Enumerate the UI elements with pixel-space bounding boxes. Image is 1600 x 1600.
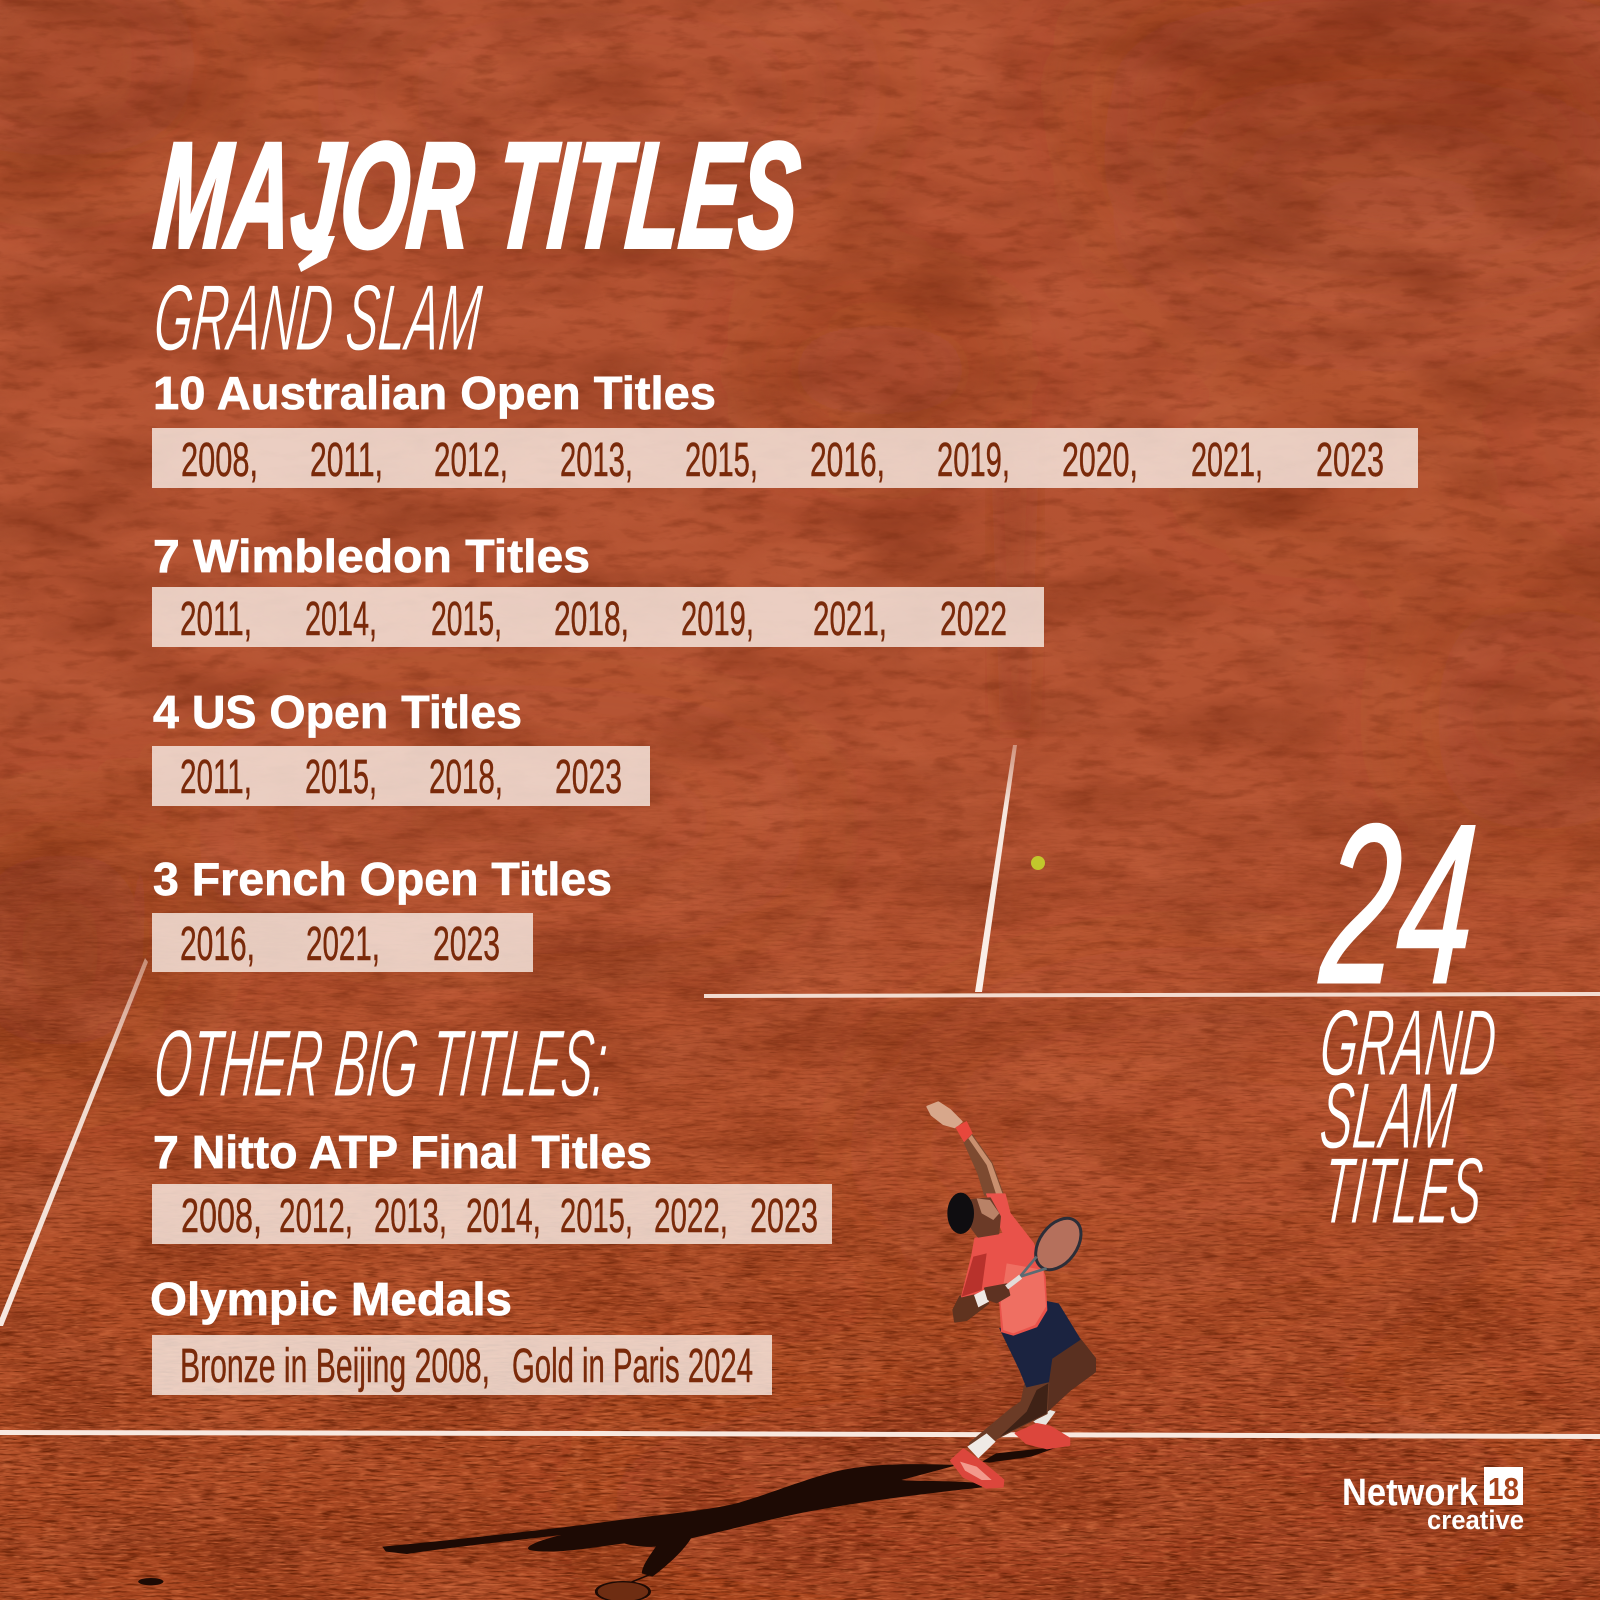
- panel: US Open: [152, 686, 650, 806]
- logo: Network18 creative: creative: [1427, 1505, 1524, 1535]
- years list: 2023: [433, 918, 500, 971]
- tennis ball: [1031, 856, 1045, 870]
- number 24: 24: [1314, 777, 1483, 1030]
- years list: 2019,: [681, 593, 754, 646]
- heading: Nitto ATP: 7 Nitto ATP Final Titles: [153, 1126, 652, 1178]
- head: face and beard: [968, 1198, 1000, 1237]
- years list: 2023: [1316, 434, 1384, 487]
- shirt: [962, 1194, 1047, 1335]
- back sock: [1033, 1410, 1056, 1428]
- medals list: Bronze in Beijing 2008,: [180, 1340, 490, 1393]
- heading: Olympic Medals: Olympic Medals: [150, 1273, 512, 1325]
- years list: 2008,: [181, 434, 258, 487]
- heading: French Open: 3 French Open Titles: [153, 853, 612, 905]
- years list: [181, 434, 1384, 487]
- player: serving tennis player: [927, 1102, 1095, 1488]
- title: [149, 111, 806, 279]
- subtitle: other big titles: OTHER BIG TITLES:: [150, 1011, 611, 1117]
- years list: 2008,: [181, 1190, 262, 1243]
- years list: 2015,: [305, 751, 377, 804]
- years list: 2018,: [429, 751, 503, 804]
- court line: service line: [704, 992, 1600, 998]
- head: hair: [947, 1193, 974, 1234]
- years list: [180, 593, 1007, 646]
- gripping hand: [985, 1284, 1009, 1302]
- logo: Network18 creative: 18: [1488, 1471, 1519, 1506]
- medals list: Gold in Paris 2024: [512, 1340, 753, 1393]
- panel: Wimbledon: [152, 530, 1044, 647]
- court line: centre line: [975, 745, 1017, 992]
- callout: 24 grand slam titles: [1314, 777, 1500, 1243]
- subtitle: grand slam: GRAND SLAM: [150, 265, 486, 370]
- years list: 2012,: [434, 434, 508, 487]
- years list: 2011,: [180, 593, 252, 646]
- back leg: [1033, 1339, 1095, 1423]
- raised arm: [957, 1125, 1003, 1195]
- medals bar: [152, 1335, 772, 1395]
- years list: 2013,: [374, 1190, 447, 1243]
- panel: French Open: [152, 853, 612, 972]
- lower arm: [953, 1293, 988, 1322]
- caption: [1316, 990, 1500, 1243]
- hand: [927, 1102, 962, 1127]
- years list: 2016,: [180, 918, 255, 971]
- logo: Network18 creative: [1342, 1467, 1524, 1535]
- shorts: [1000, 1302, 1080, 1387]
- wristband: [955, 1121, 973, 1142]
- years list: 2021,: [306, 918, 380, 971]
- wrist band white: [974, 1289, 989, 1307]
- panel: Australian Open: [152, 367, 1418, 488]
- years list: 2016,: [810, 434, 885, 487]
- logo: Network18 creative: Network: [1342, 1472, 1479, 1514]
- years list: 2019,: [937, 434, 1010, 487]
- years list: 2011,: [180, 751, 252, 804]
- player shadow: [138, 1447, 1059, 1600]
- years list: [181, 1190, 818, 1243]
- years list: 2023: [555, 751, 622, 804]
- years list: 2015,: [431, 593, 502, 646]
- years list: [180, 918, 500, 971]
- years list: 2021,: [813, 593, 887, 646]
- years list: 2023: [750, 1190, 818, 1243]
- caption: SLAM: [1316, 1063, 1460, 1168]
- year bar: [152, 746, 650, 806]
- heading: US Open: 4 US Open Titles: [153, 686, 522, 738]
- year bar: [152, 913, 533, 972]
- years list: 2011,: [310, 434, 383, 487]
- years list: [180, 751, 622, 804]
- front sock: [967, 1433, 996, 1458]
- court line: baseline: [0, 1430, 1600, 1439]
- court line: left sideline: [0, 958, 148, 1326]
- heading: Wimbledon: 7 Wimbledon Titles: [153, 530, 590, 582]
- years list: 2015,: [685, 434, 758, 487]
- years list: 2020,: [1062, 434, 1138, 487]
- years list: 2022: [940, 593, 1007, 646]
- front shoe: [951, 1449, 1003, 1488]
- panel: Nitto ATP Finals: [152, 1126, 832, 1244]
- year bar: [152, 587, 1044, 647]
- heading: Australian Open: 10 Australian Open Titles: [153, 367, 716, 419]
- years list: 2014,: [305, 593, 377, 646]
- panel: Olympic Medals: [150, 1273, 772, 1395]
- years list: 2018,: [554, 593, 629, 646]
- years list: 2013,: [560, 434, 633, 487]
- front leg: [970, 1383, 1048, 1448]
- year bar: [152, 1184, 832, 1244]
- years list: 2015,: [560, 1190, 633, 1243]
- years list: 2014,: [466, 1190, 541, 1243]
- years list: 2021,: [1191, 434, 1263, 487]
- years list: 2022,: [654, 1190, 728, 1243]
- year bar: [152, 428, 1418, 488]
- years list: 2012,: [279, 1190, 353, 1243]
- racket: [1007, 1210, 1090, 1287]
- title: MAJOR TITLES: [149, 111, 806, 279]
- back shoe: [1016, 1424, 1069, 1448]
